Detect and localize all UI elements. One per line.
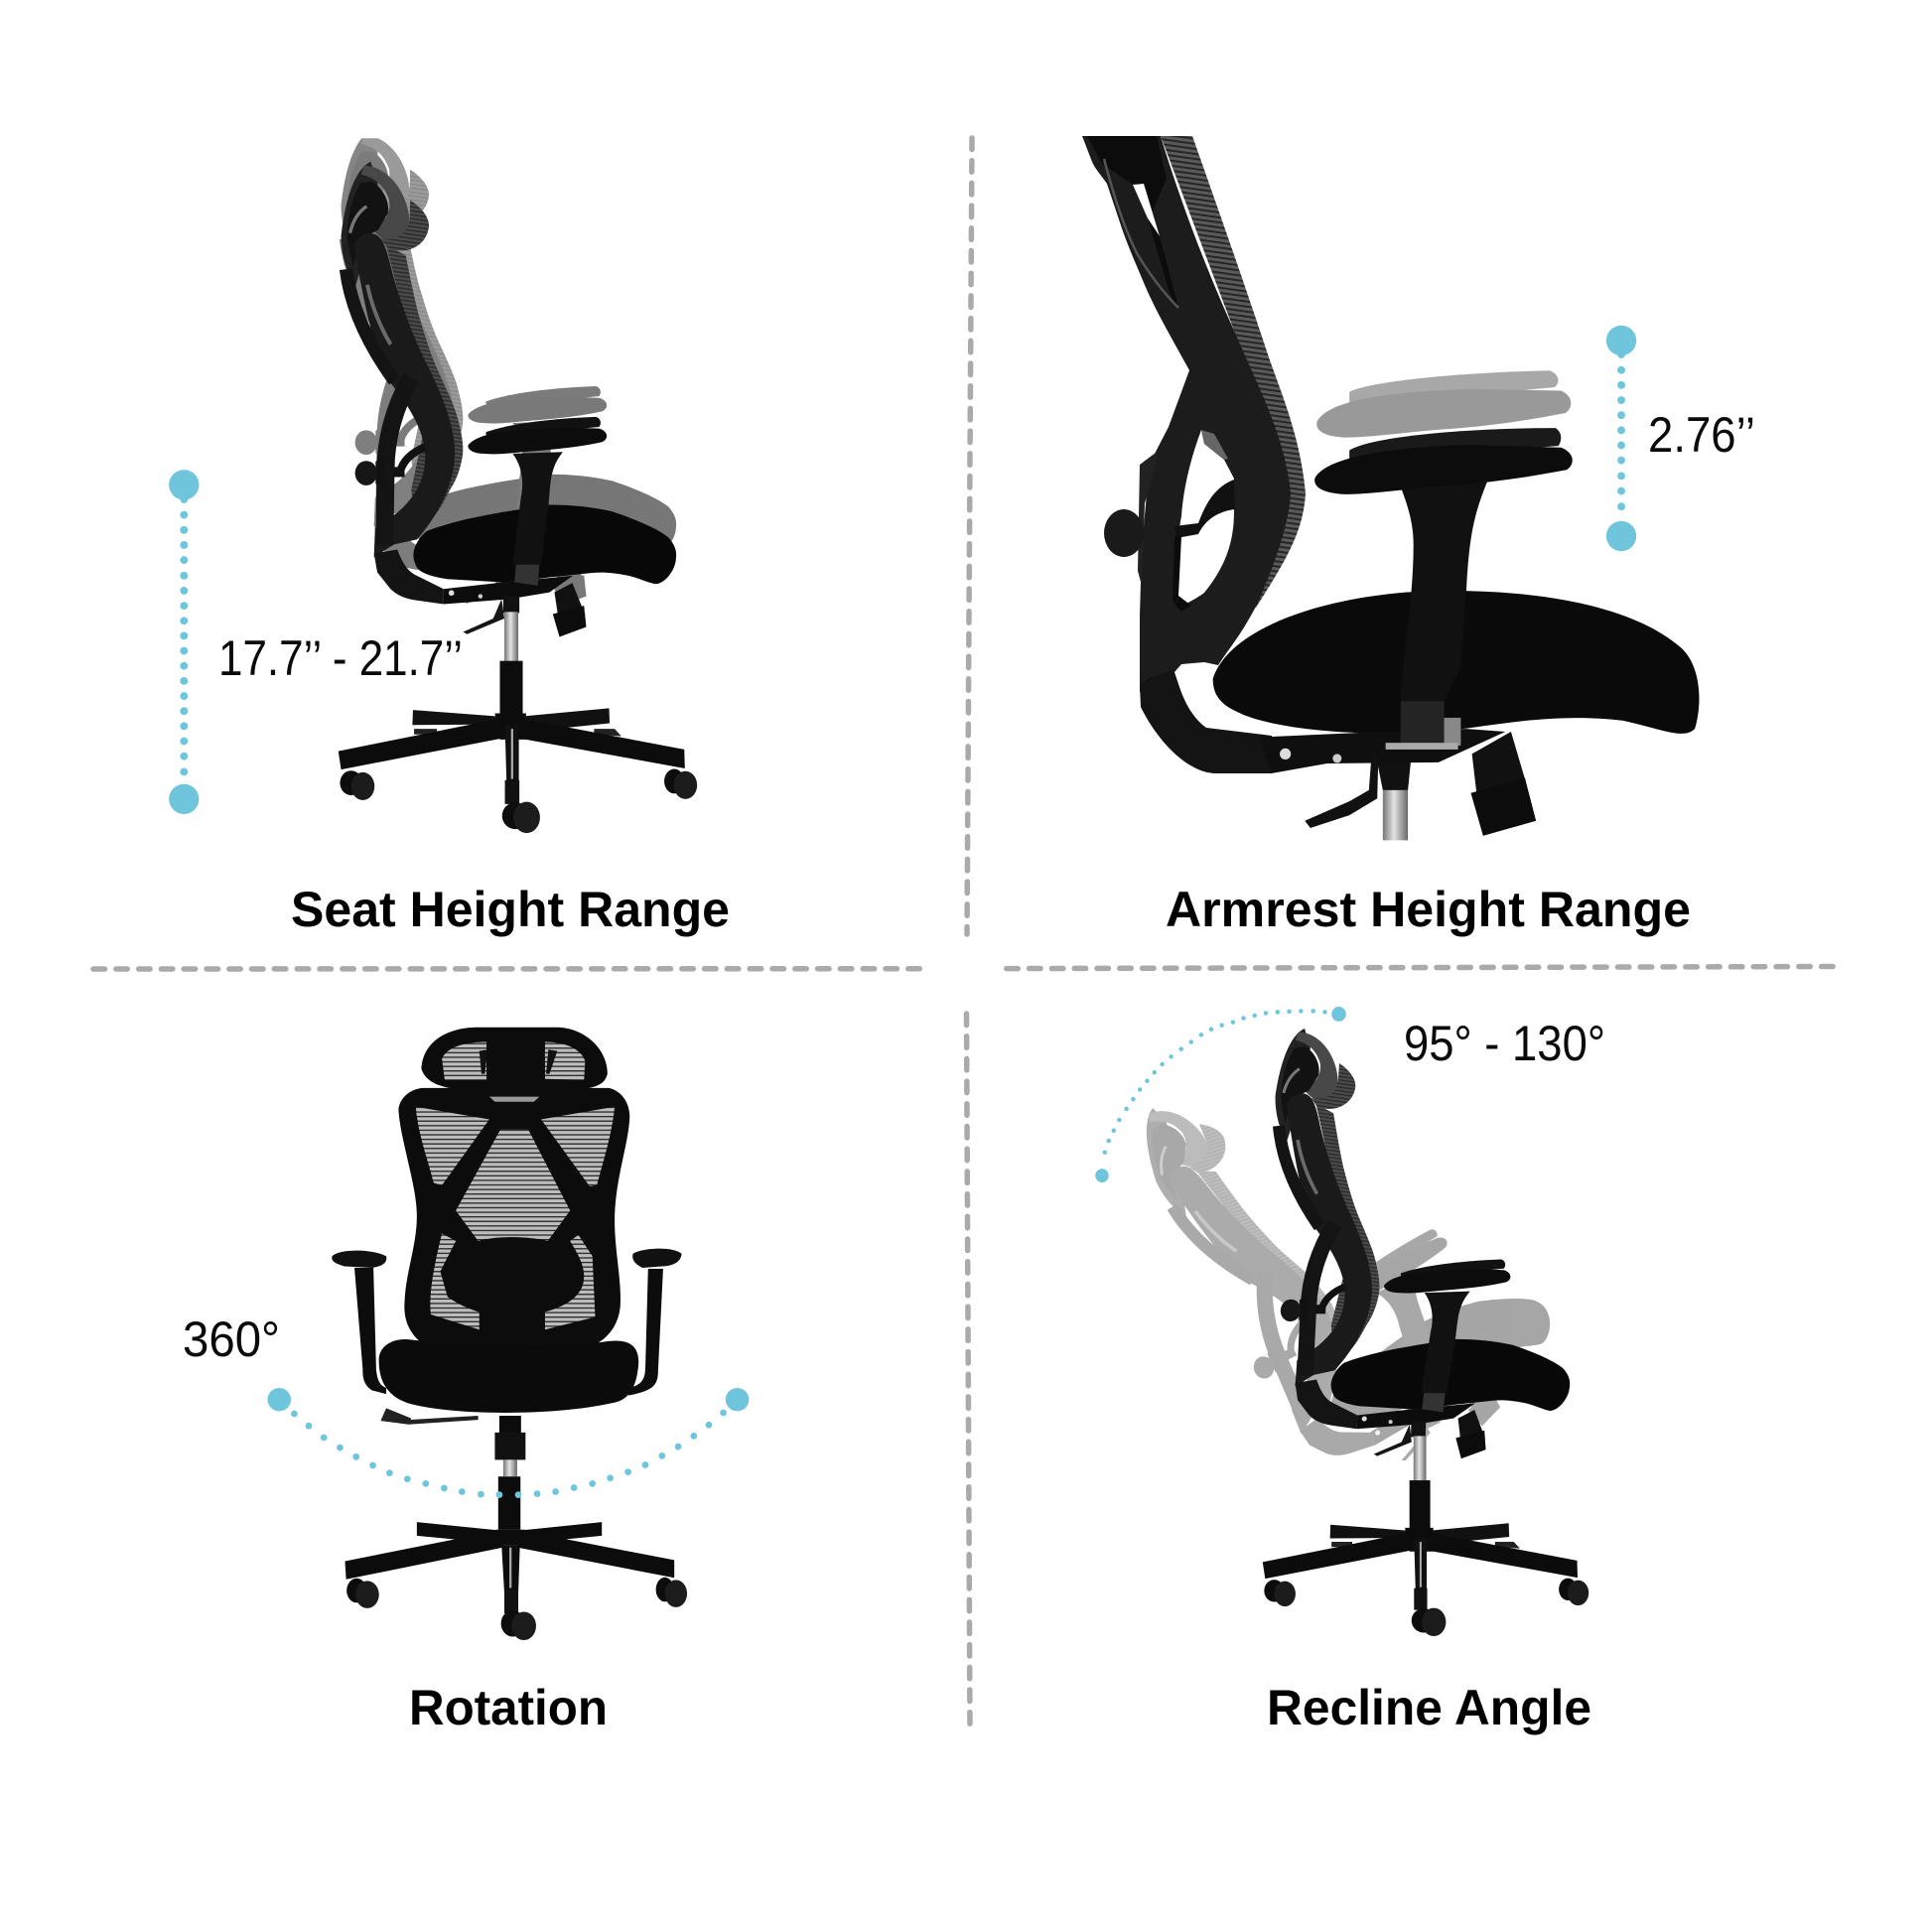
dashed divider: left horizontal xyxy=(93,966,919,972)
heading: seat height range: Seat Height Range xyxy=(291,882,730,937)
backrest mesh and frame xyxy=(1082,136,1306,773)
value: recline angle: 95° - 130° xyxy=(1404,1016,1605,1071)
dashed divider: right horizontal xyxy=(1007,967,1833,969)
value: rotation: 360° xyxy=(183,1311,280,1367)
heading: recline angle: Recline Angle xyxy=(1267,1680,1591,1735)
value: seat height: 17.7’’ - 21.7’’ xyxy=(218,630,463,686)
dashed divider: upper vertical xyxy=(967,138,972,934)
dashed divider: lower vertical xyxy=(967,1014,970,1732)
chair close-up xyxy=(1082,136,1699,840)
panel: armrest height range xyxy=(1082,136,1755,937)
measure: seat height dotted line xyxy=(169,470,199,814)
reclined ghost chair xyxy=(1129,986,1578,1513)
lower chair: seat, arm and mechanism xyxy=(1213,370,1699,840)
chair side view with raised ghost xyxy=(339,131,697,833)
measure: rotation dotted arc xyxy=(267,1388,749,1498)
heading: rotation: Rotation xyxy=(409,1680,608,1735)
measure: armrest dotted line xyxy=(1606,326,1636,551)
panel: seat height range xyxy=(169,131,730,937)
upright chair xyxy=(1263,1029,1588,1636)
panel: recline angle xyxy=(1095,986,1605,1735)
heading: armrest height range: Armrest Height Range xyxy=(1166,882,1691,937)
chair front view xyxy=(332,1028,687,1640)
measure: recline dotted arc xyxy=(1095,1007,1346,1182)
panel: rotation xyxy=(183,1028,749,1735)
value: armrest height: 2.76’’ xyxy=(1648,407,1755,463)
